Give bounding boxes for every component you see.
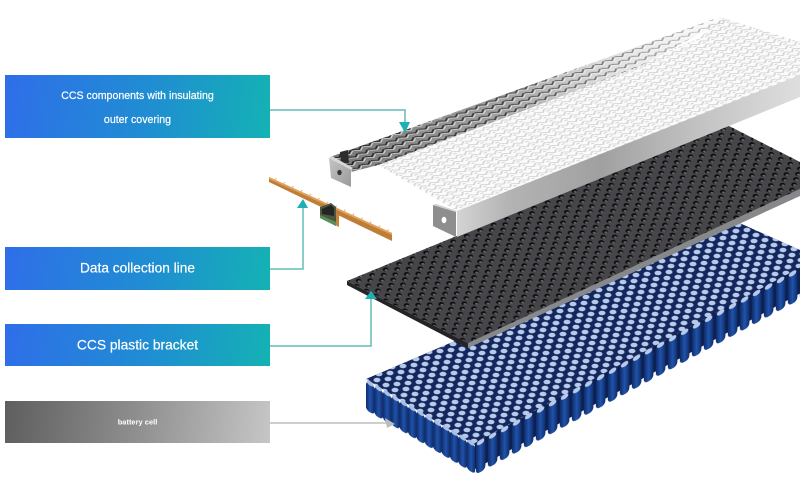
- label: Data collection line: Data collection line: [80, 260, 195, 276]
- label: CCS plastic bracket: [5, 324, 270, 366]
- label: Data collection line: [5, 247, 270, 290]
- data collection line: [269, 177, 392, 241]
- label: CCS components with insulating outer covering: CCS components with insulating: [61, 90, 214, 102]
- label: CCS components with insulating outer covering: [5, 75, 270, 138]
- label: CCS components with insulating outer covering: outer covering: [104, 114, 171, 126]
- label: battery cell: battery cell: [118, 417, 157, 426]
- arrow: bracket label to bracket: [270, 291, 377, 346]
- arrow: data line label to data line: [270, 199, 308, 269]
- CCS plastic bracket plate: [347, 125, 800, 348]
- arrow: cover label to cover: [270, 110, 410, 133]
- battery cell pack: [366, 221, 800, 485]
- label: CCS plastic bracket: CCS plastic bracket: [77, 338, 198, 352]
- label: battery cell: [5, 401, 270, 443]
- arrow: battery cell label to battery pack: [270, 418, 395, 428]
- back bracket end tab: [329, 150, 353, 187]
- CCS cover with insulating outer covering: [329, 17, 800, 237]
- front rail end cap: [433, 204, 457, 237]
- front rail: [457, 75, 800, 237]
